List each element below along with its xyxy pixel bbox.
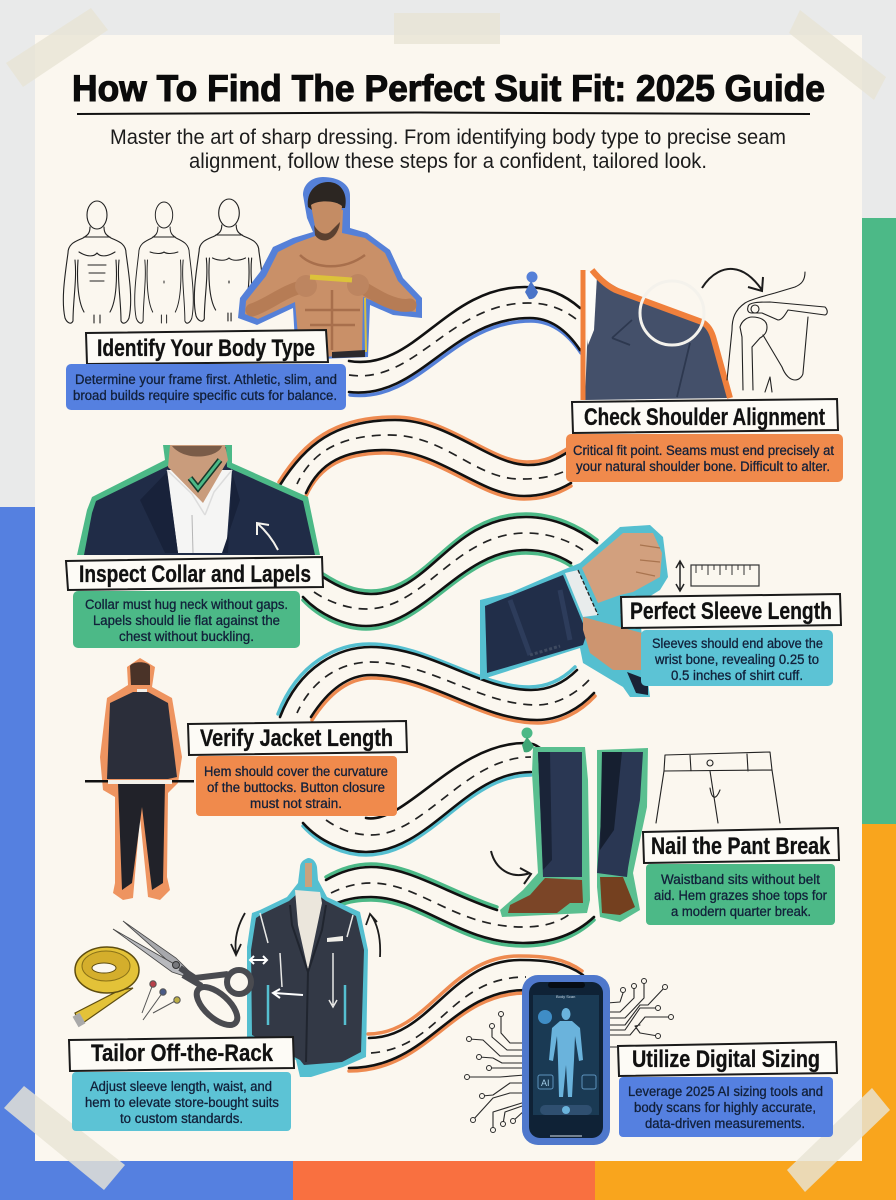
step 3 description: chest without buckling. — [119, 629, 254, 644]
step 2 description — [566, 434, 843, 482]
arrow: lapel — [257, 523, 278, 550]
step 3 heading — [66, 557, 323, 590]
road: step 5 to 6 — [303, 743, 540, 855]
arrow: to hem — [491, 851, 531, 884]
arrow: curved to shoulder — [702, 269, 763, 291]
step 8 description: Leverage 2025 AI sizing tools and — [628, 1084, 823, 1099]
icon: ruler — [691, 565, 759, 586]
step 8 heading — [618, 1042, 837, 1076]
step 3 description: Collar must hug neck without gaps. — [85, 597, 288, 612]
body outline sketches — [63, 199, 264, 323]
subtitle — [110, 125, 786, 173]
step 3 heading: Inspect Collar and Lapels — [79, 561, 311, 588]
sketch: trousers — [656, 752, 780, 823]
step 7 description: Adjust sleeve length, waist, and — [90, 1079, 272, 1094]
step 6 heading: Nail the Pant Break — [651, 833, 831, 860]
step 5 heading — [188, 721, 407, 755]
step 6 heading — [643, 828, 839, 863]
title: How To Find The Perfect Suit Fit: 2025 Guide — [72, 68, 825, 109]
photo: trousers and shoes — [500, 747, 648, 922]
step 2 heading — [572, 399, 838, 433]
step 5 description: must not strain. — [250, 796, 342, 811]
step 7 heading — [69, 1037, 294, 1071]
panel: utilize digital sizing — [464, 975, 837, 1145]
road: step 6 to 7 — [326, 864, 594, 946]
step 4 heading: Perfect Sleeve Length — [630, 598, 832, 625]
step 5 description: of the buttocks. Button closure — [207, 780, 385, 795]
step 6 description: aid. Hem grazes shoe tops for — [654, 888, 827, 903]
photo: jacket shoulder — [583, 270, 730, 400]
icon: green check mark — [190, 460, 220, 488]
icon: circuit lines — [464, 978, 674, 1132]
title underline — [77, 112, 810, 114]
measure line at hem — [85, 780, 194, 784]
icon: green push pin — [522, 728, 534, 752]
photo: man measuring chest — [238, 177, 422, 360]
step 4 description: wrist bone, revealing 0.25 to — [654, 652, 819, 667]
step 6 description — [646, 864, 835, 925]
step 8 description: data-driven measurements. — [645, 1116, 805, 1131]
connector roads — [278, 287, 597, 1071]
arrows: around jacket — [231, 913, 380, 957]
step 5 description — [196, 756, 397, 816]
step 7 description: hem to elevate store-bought suits — [85, 1095, 279, 1110]
panel: check shoulder alignment — [566, 269, 843, 482]
step 1 description — [66, 364, 346, 410]
step 7 description — [72, 1072, 291, 1131]
photo: jacket on mannequin — [247, 858, 368, 1077]
step 1 heading: Identify Your Body Type — [97, 335, 315, 362]
photo: man from behind — [100, 658, 182, 900]
panel: inspect collar and lapels — [66, 445, 323, 648]
subtitle: Master the art of sharp dressing. From identifying body type to precise seam — [110, 125, 786, 149]
step 8 heading: Utilize Digital Sizing — [632, 1046, 820, 1073]
panel: tailor off-the-rack — [69, 858, 380, 1131]
panel: identify your body type — [63, 177, 422, 410]
icon: blue push pin — [525, 272, 538, 299]
step 3 description: Lapels should lie flat against the — [93, 613, 280, 628]
icon: yellow tape measure — [73, 947, 139, 1027]
step 8 description: body scans for highly accurate, — [634, 1100, 816, 1115]
step 1 description: broad builds require specific cuts for balance. — [73, 388, 337, 403]
road: step 3 to 4 — [303, 514, 597, 629]
photo: phone with body scan: Body Scan — [556, 994, 575, 999]
panel: nail the pant break — [491, 747, 839, 925]
step 6 description: a modern quarter break. — [671, 904, 811, 919]
panel: verify jacket length — [85, 658, 407, 900]
sketch: shoulder bone — [727, 272, 827, 392]
step 2 heading: Check Shoulder Alignment — [584, 404, 825, 431]
panel: perfect sleeve length — [480, 525, 841, 697]
photo: sleeve and hand — [480, 525, 668, 697]
icon: double arrow — [676, 561, 684, 591]
subtitle: alignment, follow these steps for a confident, tailored look. — [189, 149, 707, 173]
step 4 description: 0.5 inches of shirt cuff. — [671, 668, 803, 683]
road: step 1 to 2 — [349, 287, 581, 396]
step 6 description: Waistband sits without belt — [661, 872, 820, 887]
road: step 7 to 8 — [349, 956, 583, 1071]
photo: phone with body scan — [522, 975, 610, 1145]
step 7 description: to custom standards. — [120, 1111, 243, 1126]
icon: scissors — [113, 921, 251, 1032]
step 4 heading — [621, 594, 841, 628]
icon: pins — [142, 981, 180, 1020]
step 5 heading: Verify Jacket Length — [200, 725, 393, 752]
road: step 2 to 3 — [279, 417, 571, 499]
step 4 description: Sleeves should end above the — [652, 636, 823, 651]
step 8 description — [619, 1077, 833, 1137]
road: step 4 to 5 — [278, 644, 595, 723]
step 4 description — [641, 630, 833, 686]
step 1 description: Determine your frame first. Athletic, slim, and — [75, 372, 337, 387]
step 5 description: Hem should cover the curvature — [204, 764, 388, 779]
step 7 heading: Tailor Off-the-Rack — [91, 1040, 274, 1067]
photo: collar and lapels — [77, 445, 320, 555]
photo: phone with body scan: AI — [541, 1078, 550, 1088]
step 2 description: Critical fit point. Seams must end precisely at — [573, 443, 834, 458]
step 2 description: your natural shoulder bone. Difficult to alter. — [576, 459, 830, 474]
step 3 description — [73, 591, 300, 648]
step 1 heading — [86, 330, 328, 364]
